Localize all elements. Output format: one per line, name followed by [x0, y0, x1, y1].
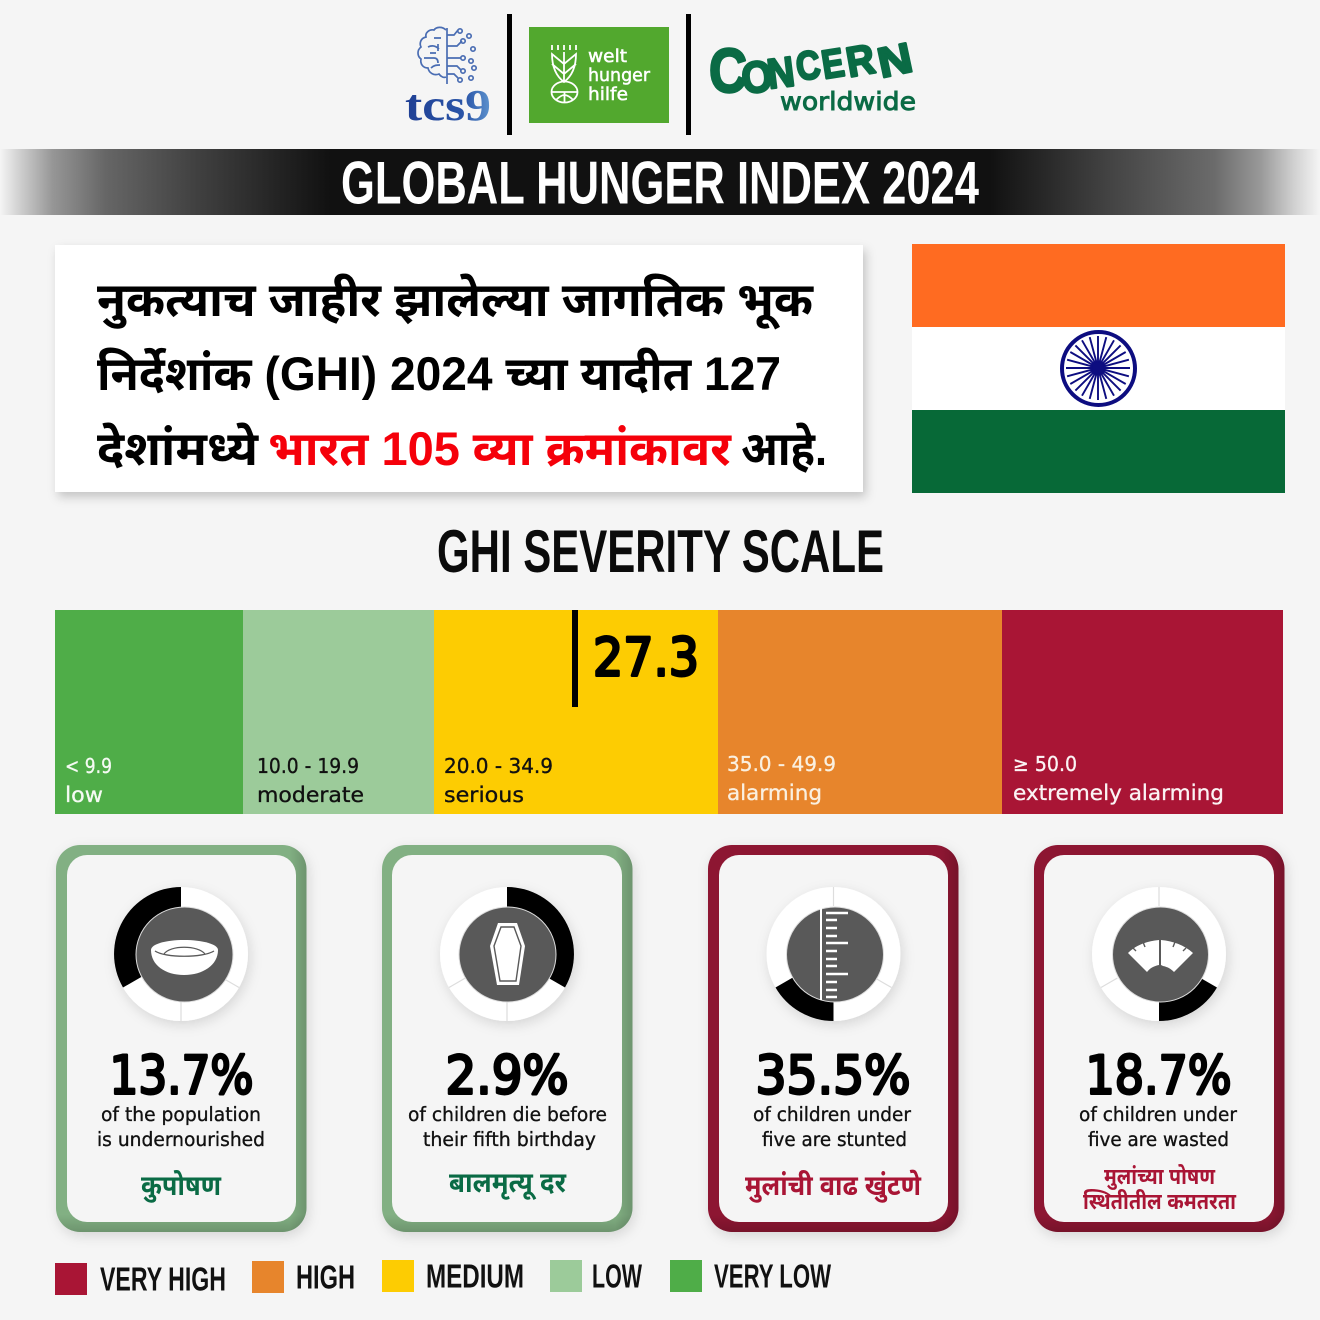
donut: 18.7%: [1092, 887, 1226, 1021]
legend: [55, 1258, 832, 1298]
segment: low: [55, 610, 243, 814]
logo: welt hunger hilfe: welt: [588, 46, 627, 67]
segment: moderate: [243, 610, 434, 814]
card: wasting: 18.7%: [1086, 1046, 1232, 1106]
segment: serious: [434, 610, 718, 814]
card: wasting: मुलांच्या पोषण: [1104, 1164, 1216, 1190]
card: undernourishment: कुपोषण: [141, 1169, 221, 1203]
logo: welt hunger hilfe: [529, 27, 669, 123]
headline panel: भारत 105 व्या क्रमांकावर: [268, 422, 732, 475]
logo: Concern Worldwide: C: [793, 43, 823, 90]
headline panel: आहे.: [741, 422, 827, 475]
divider bar right: [686, 14, 691, 135]
logo: tcs9: [405, 27, 491, 130]
segment: low: < 9.9: [65, 754, 112, 778]
legend: very low: [670, 1258, 832, 1294]
legend: medium: MEDIUM: [426, 1258, 524, 1294]
segment: alarming: 35.0 - 49.9: [727, 752, 836, 776]
logo: tcs9: tcs9: [405, 81, 491, 130]
title band: GLOBAL HUNGER INDEX 2024: [341, 150, 979, 216]
logo: Concern Worldwide: N: [873, 34, 916, 87]
segment: serious: serious: [444, 783, 524, 807]
card: wasting: स्थितीतील कमतरता: [1083, 1189, 1236, 1214]
headline panel: [55, 245, 863, 492]
logo: Concern Worldwide: worldwide: [780, 87, 916, 116]
india flag: [912, 244, 1285, 493]
legend: medium: [382, 1258, 524, 1294]
card: wasting: [1034, 845, 1284, 1232]
logo: Concern Worldwide: O: [739, 52, 775, 104]
card: wasting: five are wasted: [1088, 1128, 1229, 1151]
card: child mortality: 2.9%: [446, 1046, 568, 1106]
card: child mortality: [382, 845, 632, 1232]
headline panel: निर्देशांक (GHI) 2024 च्या यादीत 127: [97, 347, 781, 400]
logo: Concern Worldwide: [709, 34, 916, 116]
card: stunting: मुलांची वाढ खुंटणे: [745, 1168, 921, 1203]
donut: 35.5%: [766, 887, 900, 1021]
divider bar left: [507, 14, 512, 135]
segment: extremely alarming: [1002, 610, 1283, 814]
card: undernourishment: of the population: [101, 1103, 261, 1126]
severity scale bar: [55, 610, 1283, 814]
card: stunting: of children under: [753, 1103, 912, 1126]
legend: low: LOW: [592, 1258, 643, 1294]
legend: very low: VERY LOW: [714, 1258, 832, 1294]
card: child mortality: बालमृत्यू दर: [449, 1167, 567, 1200]
card: stunting: [708, 845, 958, 1232]
logo: Concern Worldwide: N: [764, 48, 797, 98]
card: wasting: of children under: [1079, 1103, 1238, 1126]
donut: 13.7%: [114, 887, 248, 1021]
card: child mortality: their fifth birthday: [423, 1128, 596, 1151]
title band: [0, 149, 1320, 216]
segment: moderate: 10.0 - 19.9: [257, 754, 359, 778]
donut: 2.9%: [440, 887, 574, 1021]
india score marker: [572, 610, 699, 707]
card: stunting: five are stunted: [762, 1128, 907, 1151]
legend: very high: VERY HIGH: [100, 1260, 226, 1298]
segment: alarming: alarming: [727, 781, 822, 805]
logo: Concern Worldwide: C: [709, 37, 747, 106]
legend: low: [550, 1258, 643, 1294]
logo: Concern Worldwide: R: [843, 35, 878, 86]
headline panel: देशांमध्ये: [97, 422, 259, 475]
legend: very high: [55, 1260, 226, 1298]
segment: moderate: moderate: [257, 783, 364, 807]
legend: high: HIGH: [296, 1258, 355, 1296]
segment: low: low: [65, 783, 103, 807]
card: undernourishment: [56, 845, 306, 1232]
card: child mortality: of children die before: [408, 1103, 607, 1126]
india score marker: 27.3: [593, 628, 699, 688]
card: undernourishment: 13.7%: [110, 1046, 254, 1106]
segment: extremely alarming: extremely alarming: [1013, 781, 1224, 805]
logo: Concern Worldwide: E: [819, 41, 847, 88]
logo: welt hunger hilfe: hilfe: [588, 84, 628, 105]
logo: welt hunger hilfe: hunger: [588, 65, 651, 86]
segment: extremely alarming: ≥ 50.0: [1013, 752, 1077, 776]
segment: serious: 20.0 - 34.9: [444, 754, 553, 778]
card: undernourishment: is undernourished: [97, 1128, 265, 1151]
legend: high: [252, 1258, 355, 1296]
headline panel: नुकत्याच जाहीर झालेल्या जागतिक भूक: [97, 273, 814, 330]
segment: alarming: [718, 610, 1002, 814]
scale heading: GHI SEVERITY SCALE: [437, 518, 884, 585]
card: stunting: 35.5%: [756, 1046, 910, 1106]
